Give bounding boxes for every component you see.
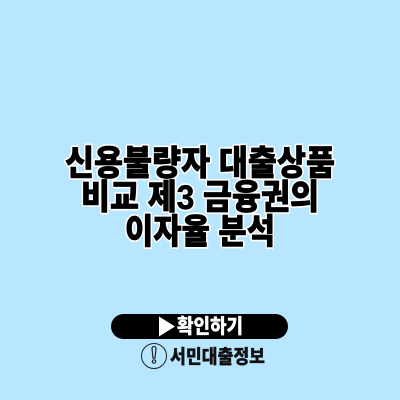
title: 비교 제3 금융권의 — [81, 179, 319, 217]
button: 확인하기 — [111, 314, 288, 339]
title — [65, 145, 335, 252]
title: 이자율 분석 — [125, 214, 275, 252]
title: 신용불량자 대출상품 — [65, 145, 335, 183]
title: 비교 제3 금융권의 — [81, 179, 319, 217]
title: 신용불량자 대출상품 — [65, 145, 335, 183]
title: 이자율 분석 — [125, 214, 275, 252]
icon: exclamation circle — [142, 344, 166, 368]
icon: play triangle — [159, 316, 175, 336]
brand logo: 서민대출정보 — [142, 344, 265, 368]
button: 확인하기: 확인하기 — [177, 315, 243, 338]
brand logo: 서민대출정보: 서민대출정보 — [170, 346, 265, 368]
